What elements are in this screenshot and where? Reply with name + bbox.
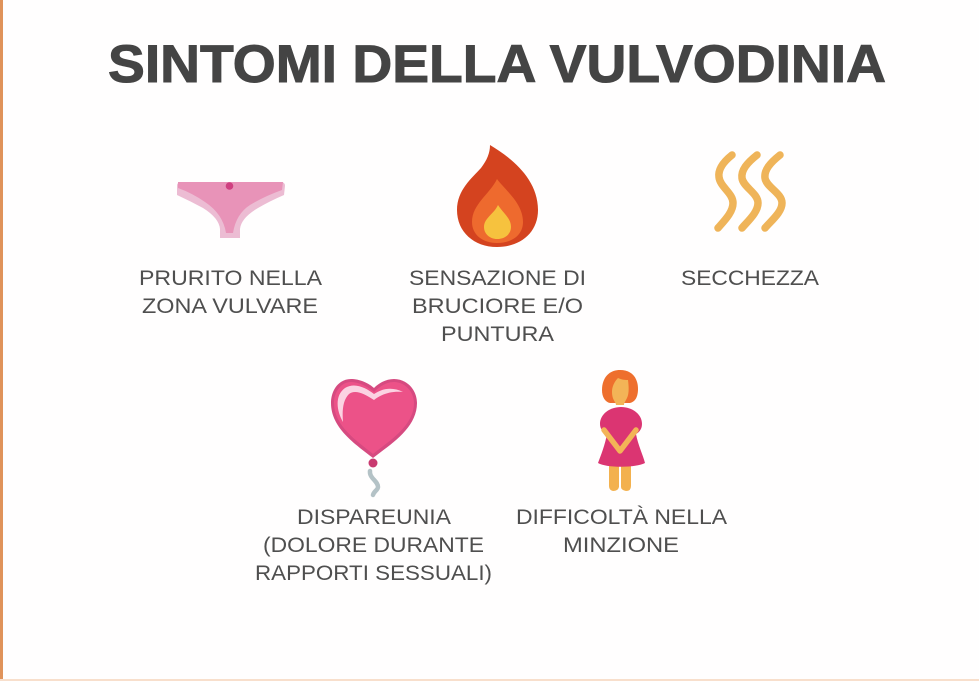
label: dyspareunia: RAPPORTI SESSUALI) xyxy=(255,562,492,585)
label: dyspareunia: DISPAREUNIA xyxy=(297,506,451,529)
bottom orange border xyxy=(0,679,979,681)
icon: dryness waves xyxy=(718,155,782,228)
label: burning: PUNTURA xyxy=(441,323,554,346)
label: urination difficulty: MINZIONE xyxy=(563,534,679,557)
label: burning: SENSAZIONE DI xyxy=(409,267,586,290)
icon: girl xyxy=(598,370,645,491)
left orange border xyxy=(0,0,3,681)
label: dyspareunia: (DOLORE DURANTE xyxy=(263,534,484,557)
label: dyspareunia xyxy=(255,506,492,585)
icon: underwear xyxy=(177,182,285,238)
icon: flame xyxy=(457,145,538,247)
label: urination difficulty xyxy=(516,506,727,557)
label: itching xyxy=(139,267,322,318)
label: burning: BRUCIORE E/O xyxy=(412,295,583,318)
label: burning xyxy=(409,267,586,346)
label: itching: PRURITO NELLA xyxy=(139,267,322,290)
title: SINTOMI DELLA VULVODINIA xyxy=(108,35,886,94)
icon: heart balloon xyxy=(331,379,417,495)
label: urination difficulty: DIFFICOLTÀ NELLA xyxy=(516,506,727,529)
label: dryness: SECCHEZZA xyxy=(681,267,819,290)
label: itching: ZONA VULVARE xyxy=(142,295,318,318)
